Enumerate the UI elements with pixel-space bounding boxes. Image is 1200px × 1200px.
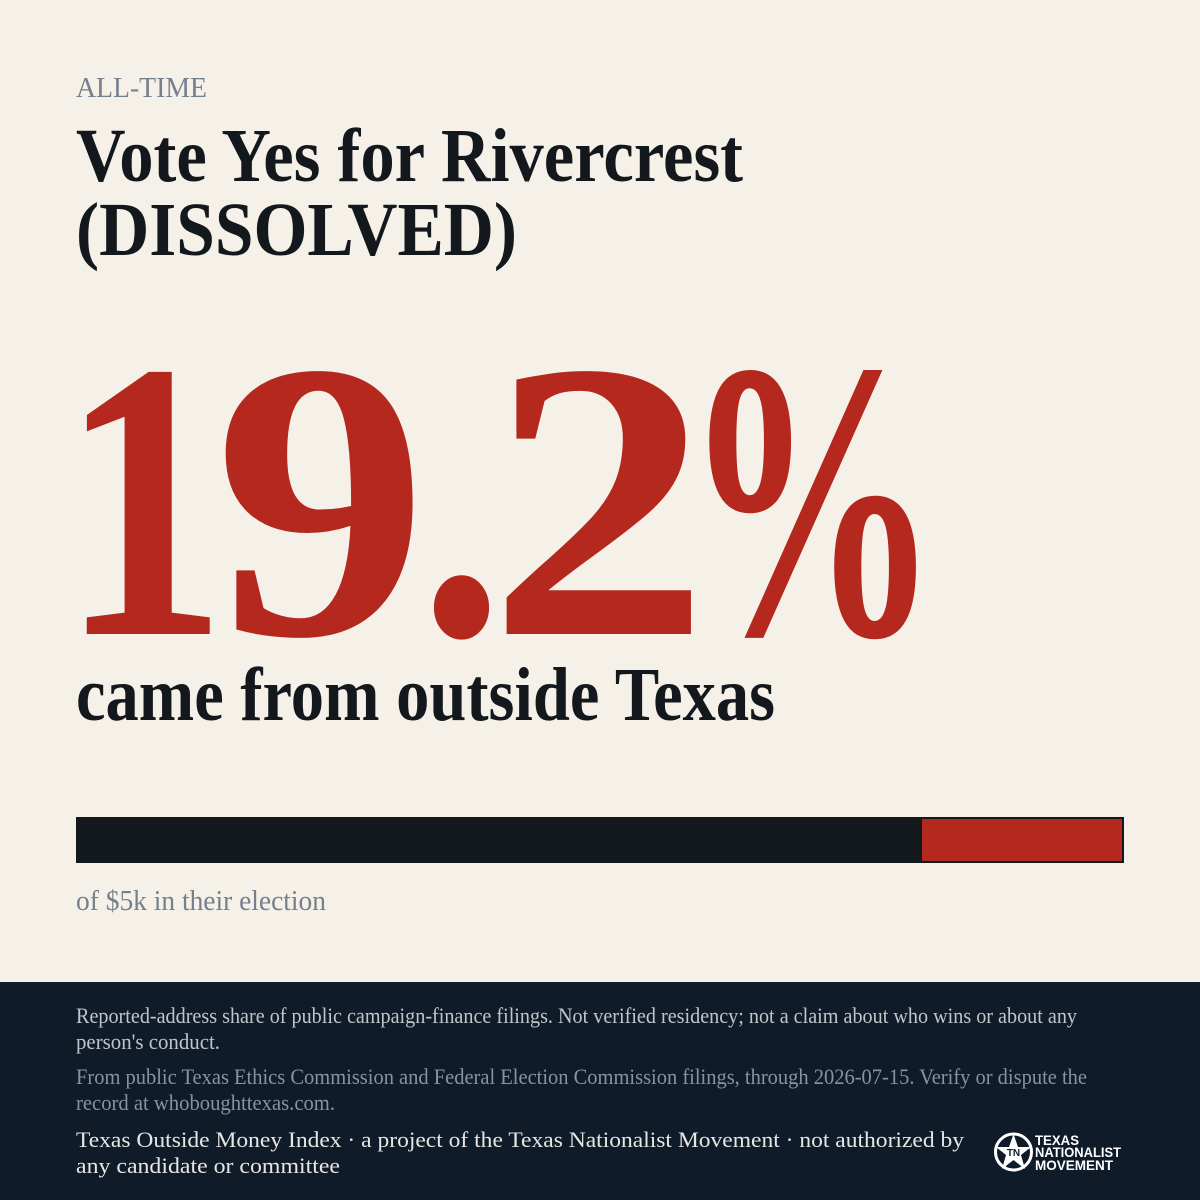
footer panel: [0, 982, 1200, 1200]
logo wordmark: TEXAS: [1035, 1132, 1079, 1148]
big percentage: 19.2%: 9: [214, 280, 428, 720]
attribution text: Texas Outside Money Index · a project of the Texas Nationalist Movement · not authorized by: [76, 1127, 964, 1152]
title: [76, 114, 743, 272]
source text: From public Texas Ethics Commission and Federal Election Commission filings, through 2026-07-15. Verify or dispute the: [76, 1064, 1087, 1089]
big percentage: 19.2%: .: [419, 280, 504, 720]
subheading: came from outside Texas: [76, 653, 775, 737]
big percentage: 19.2%: 2: [488, 280, 710, 720]
big percentage: 19.2%: [60, 280, 940, 720]
attribution text: any candidate or committee: [76, 1153, 340, 1178]
big percentage: 19.2%: %: [683, 280, 940, 720]
attribution text: [76, 1127, 964, 1178]
big percentage: 19.2%: 1: [60, 280, 227, 720]
disclaimer text: Reported-address share of public campaign-finance filings. Not verified residency; not a claim about who wins or about any: [76, 1003, 1077, 1028]
source text: [76, 1064, 1087, 1115]
logo wordmark: MOVEMENT: [1035, 1157, 1113, 1173]
disclaimer text: person's conduct.: [76, 1029, 220, 1054]
icon: star in ring: TN: [1007, 1148, 1020, 1159]
logo wordmark: [1035, 1132, 1121, 1173]
title: (DISSOLVED): [76, 188, 517, 272]
logo: Texas Nationalist Movement: [996, 1132, 1121, 1173]
eyebrow: ALL-TIME: ALL-TIME: [76, 72, 207, 104]
title: Vote Yes for Rivercrest: [76, 114, 743, 198]
source text: record at whoboughttexas.com.: [76, 1090, 335, 1115]
logo wordmark: NATIONALIST: [1035, 1144, 1121, 1160]
bar caption: of $5k in their election: [76, 885, 326, 917]
disclaimer text: [76, 1003, 1077, 1054]
share bar: [76, 817, 1124, 863]
